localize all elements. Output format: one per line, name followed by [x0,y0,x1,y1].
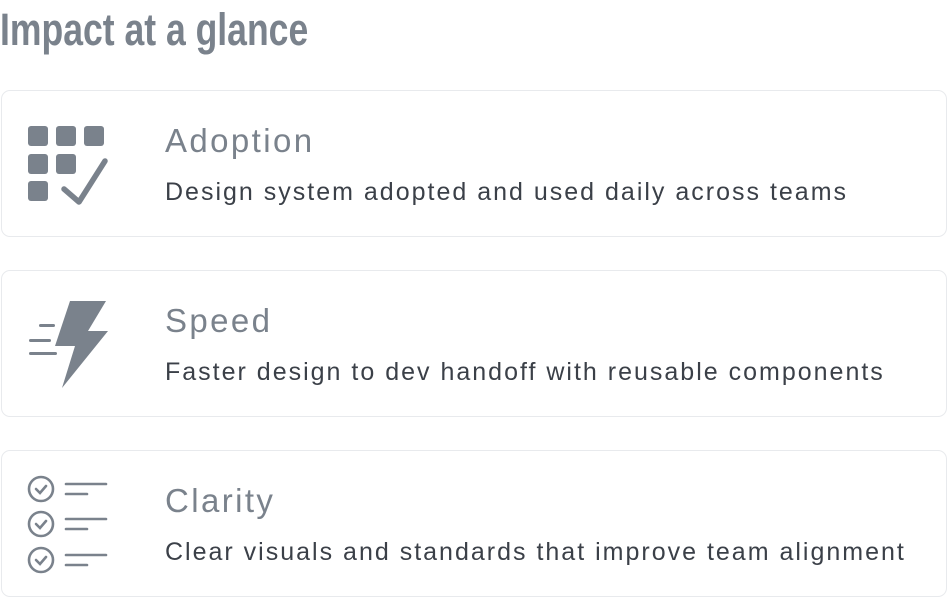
icon: grid check [28,126,108,205]
panel: adoption [1,90,947,237]
panel: clarity [1,450,947,597]
panel: speed [1,270,947,417]
text: clarity: Clear visuals and standards that improve team alignment [165,538,906,566]
heading: clarity: Clarity [165,482,275,519]
icon: checklist [28,476,108,574]
title: Impact at a glance [0,4,308,55]
heading: adoption: Adoption [165,122,314,159]
heading: speed: Speed [165,302,272,339]
text: adoption: Design system adopted and used daily across teams [165,178,848,206]
icon: lightning [29,301,108,388]
text: speed: Faster design to dev handoff with reusable components [165,358,885,386]
